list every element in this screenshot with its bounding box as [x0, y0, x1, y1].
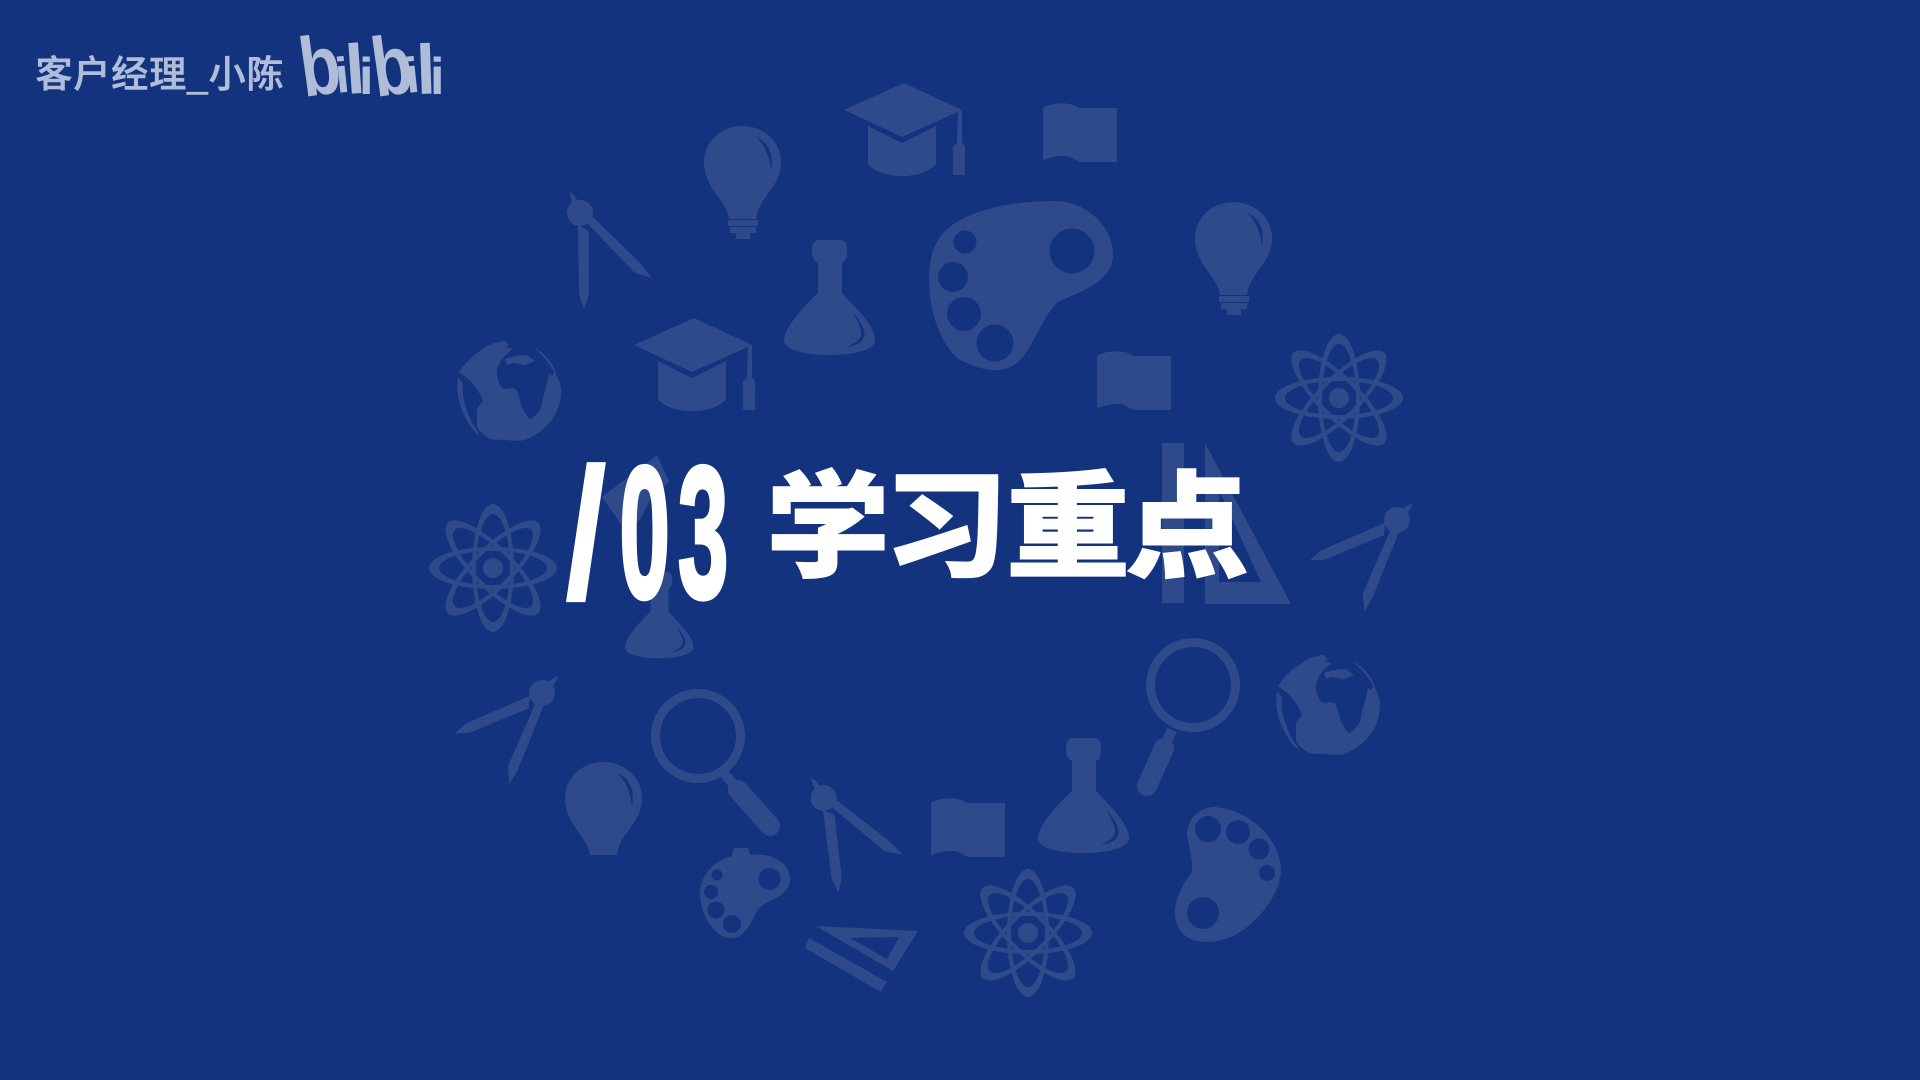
bilibili logo wordmark: l: [343, 30, 367, 109]
bilibili logo wordmark: b: [365, 16, 418, 115]
icon: graduation cap left: [634, 318, 755, 411]
bilibili logo wordmark: i: [402, 47, 422, 104]
icon: book right: [1097, 351, 1171, 410]
icon: book top: [1043, 103, 1117, 162]
icon: globe left: [457, 341, 561, 441]
icon: magnifier left: [656, 694, 770, 826]
icon: globe right: [1276, 655, 1380, 755]
icon: set square bottom: [805, 926, 918, 992]
icon: diamond shape behind title: [602, 455, 669, 530]
icon: atom right: [1275, 334, 1403, 462]
decorative icon ring: [429, 83, 1444, 997]
icon: small palette: [700, 848, 790, 938]
bilibili logo wordmark: i: [332, 47, 352, 104]
icon: atom left: [429, 504, 557, 632]
icon: magnifier right: [1147, 642, 1236, 786]
section number: /: [566, 431, 606, 636]
uploader name: 客户经理_小陈: [36, 54, 284, 95]
icon: palette lower right: [1175, 807, 1281, 942]
icon: graduation cap top: [844, 83, 965, 176]
section number: [566, 429, 728, 638]
icon: flask top: [784, 240, 875, 355]
icon: compass upper left: [567, 192, 652, 309]
icon: book bottom: [931, 798, 1005, 857]
icon: set square behind title: [1162, 443, 1291, 604]
icon: light bulb lower left: [565, 762, 642, 855]
bilibili logo wordmark: i: [430, 48, 444, 106]
icon: compass bottom: [808, 769, 906, 895]
bilibili logo wordmark: [293, 16, 444, 115]
bilibili logo wordmark: l: [415, 30, 437, 109]
icon: atom bottom: [964, 869, 1092, 997]
section title: [566, 429, 1249, 638]
icon: light bulb right: [1195, 202, 1272, 315]
bilibili logo wordmark: b: [293, 16, 346, 115]
bilibili logo wordmark: i: [359, 48, 373, 106]
icon: compass lower left: [448, 673, 589, 796]
uploader watermark: [36, 16, 444, 115]
icon: flask lower right: [1038, 738, 1129, 853]
icon: compass right: [1303, 500, 1444, 623]
icon: light bulb top: [704, 126, 781, 239]
icon: large palette: [929, 201, 1113, 370]
section heading: 学习重点: [766, 464, 1249, 593]
icon: flask behind title: [625, 572, 693, 658]
section number: 3: [678, 429, 728, 638]
section number: 0: [620, 429, 670, 638]
